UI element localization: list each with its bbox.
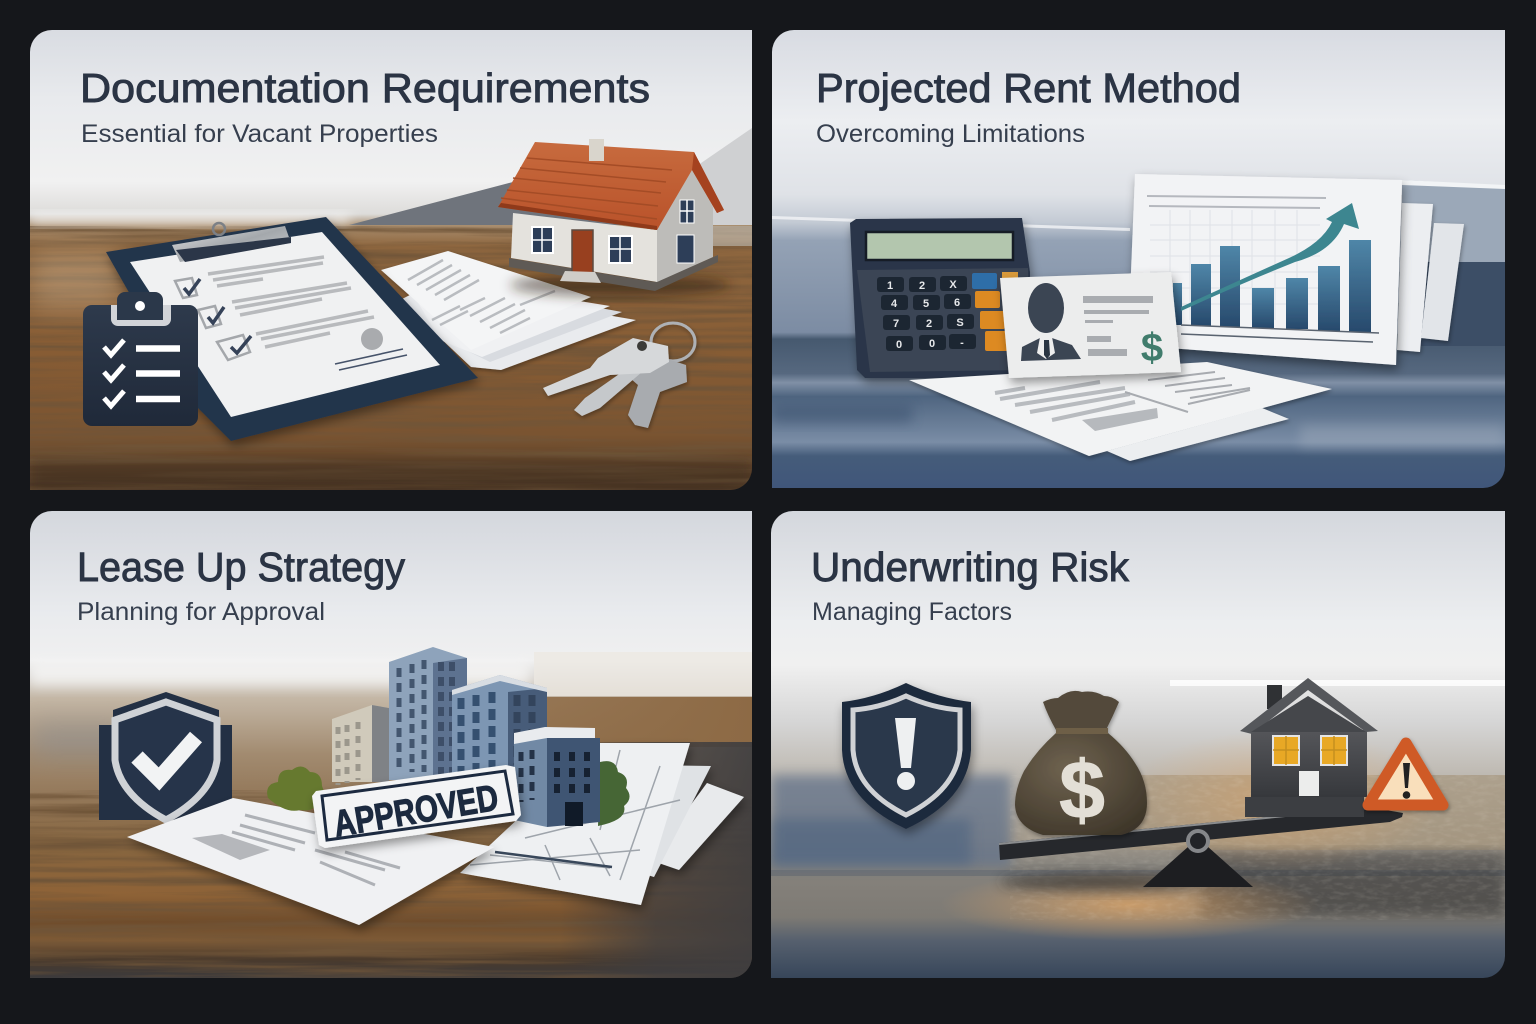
calculator: 2 [926,318,932,330]
title: Underwriting Risk [811,544,1129,590]
calculator: 0 [929,338,935,350]
calculator: S [956,317,964,329]
title: Documentation Requirements [80,65,650,111]
calculator keys [877,276,976,351]
calculator: 1 [887,280,893,292]
calculator: X [949,279,957,291]
building: tower [389,647,467,780]
title: Lease Up Strategy [77,544,405,590]
icon: shield check [99,692,232,820]
icon: warning triangle [1368,743,1443,805]
building: mid [452,675,547,775]
icon: money bag [1015,691,1147,836]
door [572,230,593,273]
approved stamp: APPROVED [331,777,501,845]
calculator [850,218,1030,378]
windows [532,200,694,263]
subtitle: Essential for Vacant Properties [81,120,438,148]
subtitle: Overcoming Limitations [816,120,1085,148]
building: front [514,727,600,827]
chart sheet [1128,174,1402,365]
panel: lease up strategy [30,511,752,978]
calculator: 0 [896,339,902,351]
chimney [589,139,604,161]
front documents [909,362,1332,461]
trend arrow [1181,203,1359,311]
building: tan [332,705,389,785]
calculator: 4 [891,298,898,310]
calculator: 5 [923,298,929,310]
calculator: 6 [954,297,960,309]
bushes [267,761,630,826]
papers stack [381,251,636,370]
icon: checklist clipboard [83,292,198,426]
calculator: 2 [919,280,925,292]
clipboard [106,217,478,441]
icon: warning shield [842,683,971,829]
panel: documentation requirements [30,30,752,490]
keys [543,323,695,428]
applicant card [1000,272,1181,378]
title: Projected Rent Method [816,65,1241,111]
calculator: 7 [893,318,899,330]
checklist rows [175,257,374,360]
calculator: - [960,337,964,349]
icon: house [1240,678,1378,817]
back sheets [1397,203,1464,352]
house [498,139,730,297]
icon: person silhouette [1021,283,1081,361]
bar chart [1173,240,1371,332]
dollar sign: $ [1141,326,1163,370]
blueprint papers [460,743,744,905]
buildings [332,647,600,827]
subtitle: Managing Factors [812,598,1012,626]
contract paper [127,798,494,925]
subtitle: Planning for Approval [77,598,325,626]
seesaw [999,807,1403,887]
seal and signature [335,328,407,370]
icon: money bag: $ [1059,745,1105,836]
clip [172,223,291,262]
panel: projected rent method [772,30,1505,488]
roof [498,142,724,230]
panel: underwriting risk [771,511,1505,978]
